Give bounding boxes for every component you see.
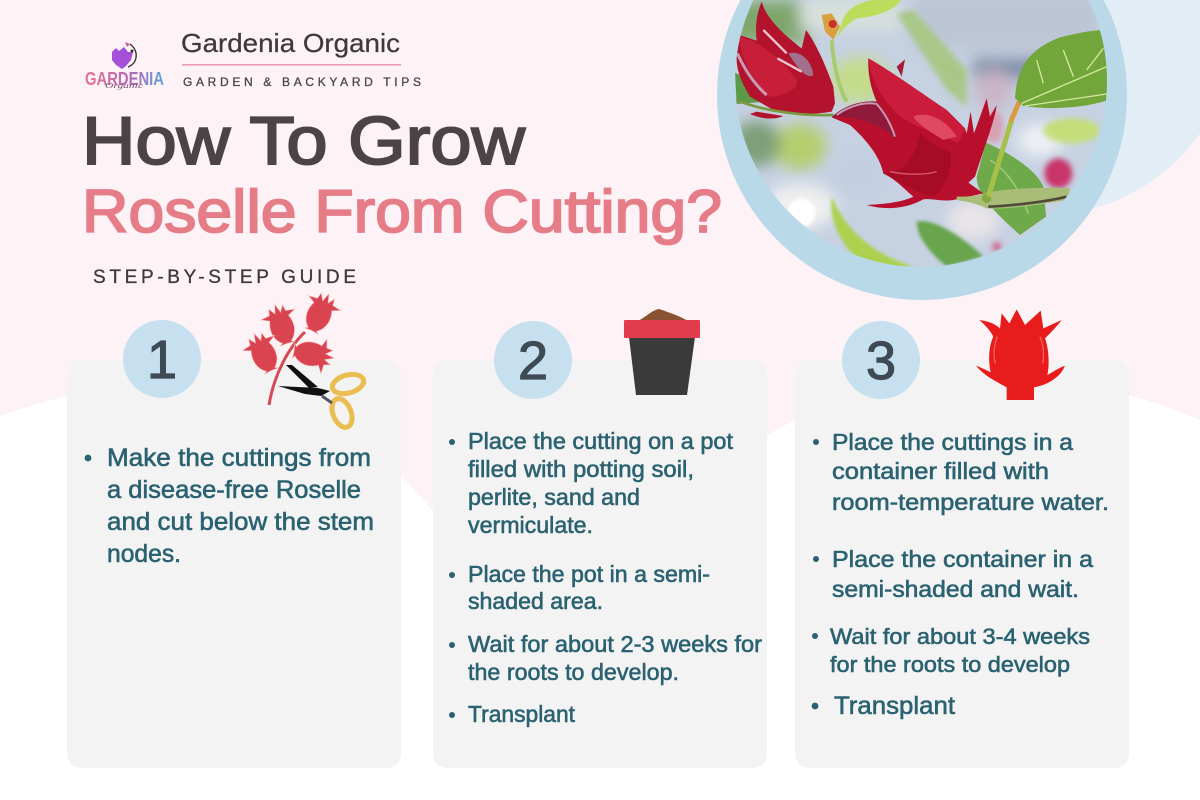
number 1: 1 [147,330,177,390]
left flower leaf [735,72,760,104]
number 1 [123,320,201,398]
step 3 text: for the roots to develop [830,652,1070,677]
step 1 text: and cut below the stem [107,508,374,536]
step 1 text [85,444,374,568]
card 2 [433,360,767,768]
step 2 text: Place the pot in a semi- [468,561,710,587]
step 2 text [449,428,762,727]
icon: roselle calyx [976,309,1065,400]
step 2 text: Transplant [468,701,576,727]
step 1 text: Make the cuttings from [107,444,371,472]
step 2 text: filled with potting soil, [468,456,694,482]
step 1 text: a disease-free Roselle [107,476,361,504]
step 3 text: room-temperature water. [832,489,1109,515]
brand logo [85,42,164,90]
subtitle: STEP-BY-STEP GUIDE [93,267,356,288]
left flower [737,2,835,114]
step 3 text: semi-shaded and wait. [832,576,1079,602]
main stem [957,188,1071,209]
number 3 [842,321,920,399]
card 1 [67,360,401,768]
upper stem and bud [832,40,847,102]
step 3 text: Transplant [834,692,955,720]
title line 2: Roselle From Cutting? [82,178,722,245]
icon: roselle branch and scissors [238,286,366,430]
brand name: Gardenia Organic [181,28,400,58]
title line 1: How To Grow [82,103,526,179]
step 2 text: Wait for about 2-3 weeks for [468,631,762,657]
number 2: 2 [518,331,548,391]
step 3 text: Place the cuttings in a [832,429,1073,455]
step 2 text: shaded area. [468,588,603,614]
step 2 text: the roots to develop. [468,659,679,685]
step 2 text: Place the cutting on a pot [468,428,734,454]
photo: roselle in ring frame [717,0,1127,300]
logo mark [112,42,136,69]
step 3 text: Wait for about 3-4 weeks [830,624,1090,649]
petiole [988,120,1012,197]
step 3 text [812,429,1109,720]
panel: step 3 [795,309,1129,768]
logo script: Organic [105,82,144,90]
step 3 text: container filled with [832,458,1049,484]
panel: step 2 [433,309,767,768]
main flower [832,58,997,208]
step 2 text: vermiculate. [468,512,593,538]
step 2 text: perlite, sand and [468,484,640,510]
icon: pot [624,309,700,395]
card 3 [795,360,1129,768]
panel: step 1 [67,286,401,768]
step 1 text: nodes. [107,540,181,568]
step 3 text: Place the container in a [832,546,1093,572]
top right leaf [1015,30,1108,108]
lower leaf [977,143,1046,235]
number 3: 3 [866,331,896,391]
logo wordmark: GARDENIA [85,69,164,89]
number 2 [494,321,572,399]
ring frame [717,0,1127,300]
brand tagline: GARDEN & BACKYARD TIPS [183,75,421,89]
